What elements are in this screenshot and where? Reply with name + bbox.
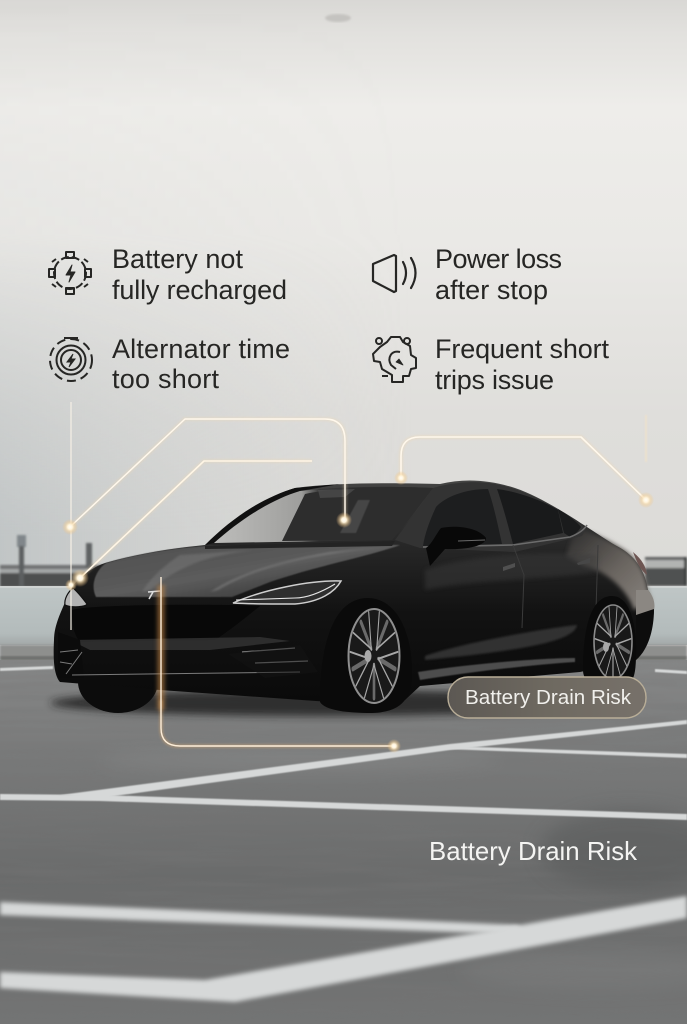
connector line: faint upper right <box>645 415 647 462</box>
car <box>54 481 654 713</box>
icon: battery gear with bolt <box>49 252 91 294</box>
feature text: alternator time too short: too short <box>112 364 219 394</box>
caption: battery drain risk: Battery Drain Risk <box>429 838 637 866</box>
connector line: bumper to ground point <box>158 577 394 746</box>
car body <box>54 481 654 702</box>
feature text: battery not fully recharged: fully recharged <box>112 275 287 305</box>
icon: speaker <box>373 255 416 292</box>
car shadow <box>50 690 590 716</box>
rear bumper <box>636 590 654 618</box>
background: concrete wall <box>0 586 687 661</box>
fascia and grille <box>72 605 260 642</box>
badge: battery drain risk pill: Battery Drain Risk <box>465 686 632 709</box>
connector line: roof to sky point <box>401 437 646 500</box>
windshield <box>214 487 433 543</box>
connector line: left vertical <box>70 402 72 630</box>
quarter window <box>558 509 581 537</box>
feature text: frequent short trips issue: Frequent short <box>435 334 609 364</box>
feature text: power loss after stop: Power loss <box>435 244 562 274</box>
feature text: alternator time too short: Alternator time <box>112 334 290 364</box>
glowing connector dots <box>62 471 654 753</box>
background: asphalt parking ground <box>0 660 687 1024</box>
connector line: front hood point <box>80 461 312 578</box>
icon: alternator dial with bolt <box>50 338 92 381</box>
parking lot lines <box>0 666 687 1002</box>
feature text: frequent short trips issue: trips issue <box>435 365 554 395</box>
window trim <box>423 525 587 547</box>
left headlight <box>65 588 87 607</box>
side window front <box>423 489 502 546</box>
door panel reflections <box>425 625 577 660</box>
feature text: battery not fully recharged: Battery not <box>112 244 243 274</box>
pillar and roof <box>395 482 586 552</box>
near front wheel <box>320 598 412 713</box>
far front wheel <box>78 651 158 713</box>
background: sky <box>0 0 687 670</box>
badge: battery drain risk pill <box>448 677 646 718</box>
right headlight <box>233 581 341 604</box>
rear quarter panel <box>566 528 652 610</box>
side window rear <box>497 489 563 544</box>
connector line: windshield point <box>71 419 345 526</box>
icon: engine <box>373 337 416 382</box>
cowl and wiper strip <box>205 541 395 549</box>
hood <box>94 545 400 597</box>
feature text: power loss after stop: after stop <box>435 275 548 305</box>
tesla style badge <box>148 591 160 599</box>
background: distant parking structure <box>0 535 687 587</box>
tail light <box>633 552 647 575</box>
roof rail <box>205 484 340 545</box>
side mirror <box>426 527 486 566</box>
rear wheel <box>583 596 636 682</box>
